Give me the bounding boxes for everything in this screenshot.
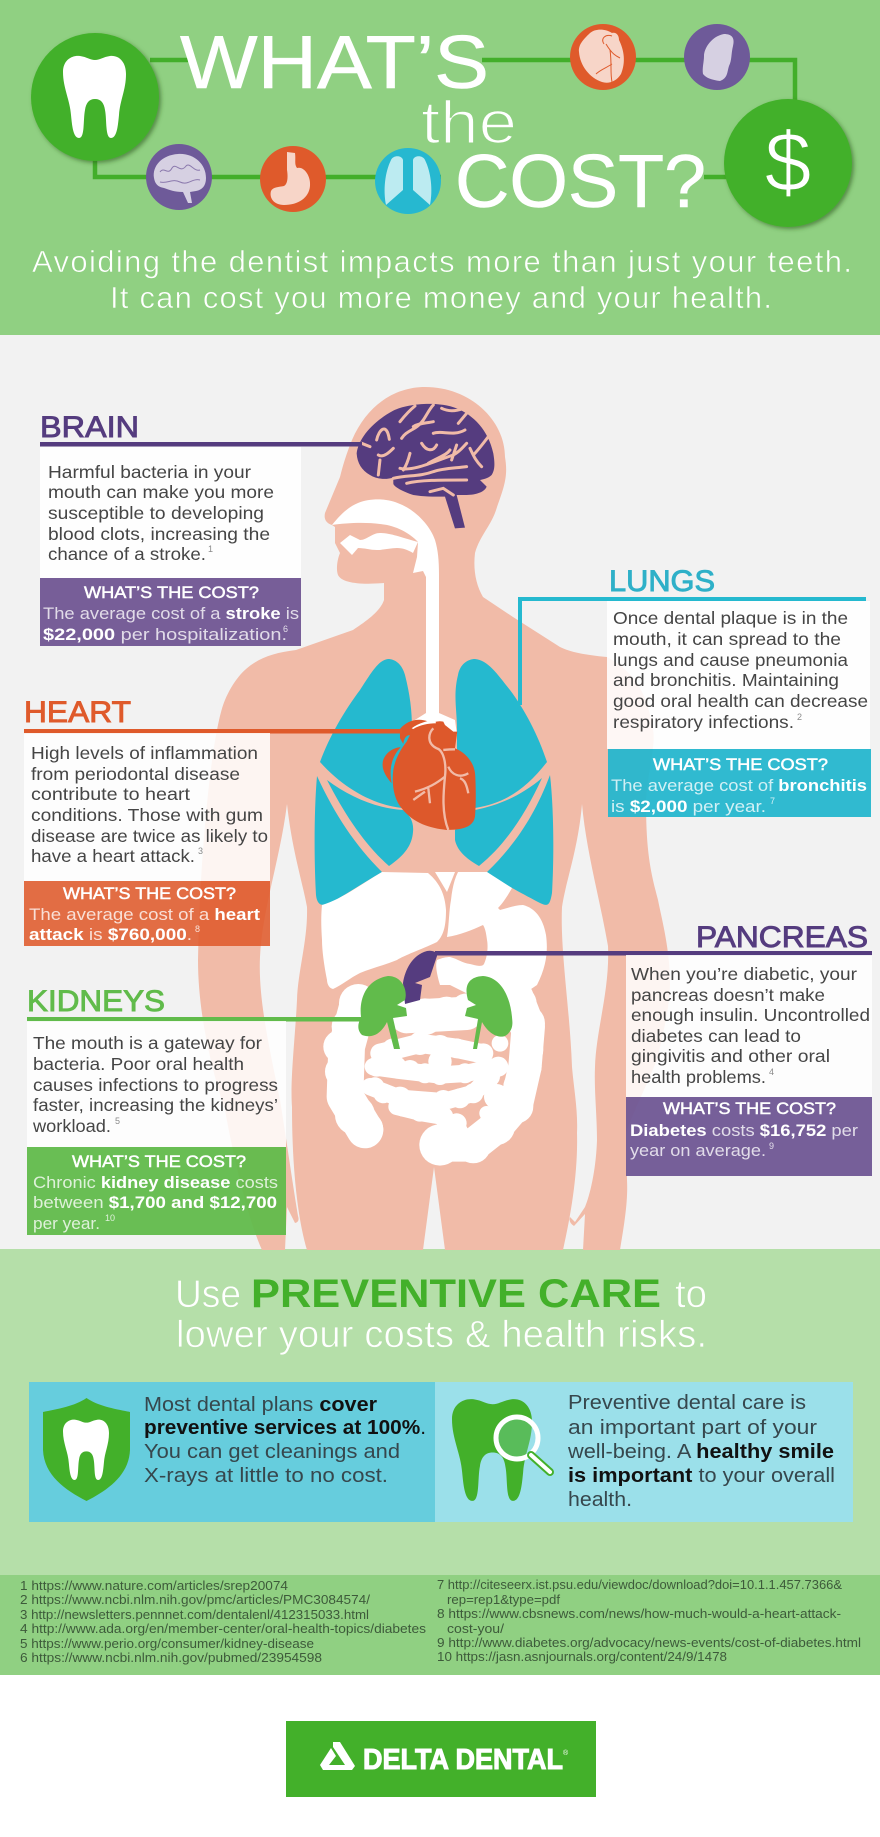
organ: heart [383,719,476,830]
text block: pancreas description: 4 [769,1067,774,1077]
organ: pancreas [403,951,437,1004]
callout: brain cost [40,578,301,646]
icon: heart circle [570,24,636,90]
callout: lungs cost: is $2,000 per year. [611,797,766,816]
text block: well-being: is important to your overall [568,1465,835,1487]
text block: lungs description: lungs and cause pneumonia [613,650,848,670]
panel: pancreas [435,921,872,1176]
text block: lungs description: good oral health can decrease [613,691,868,711]
references: left column: 5 https://www.perio.org/consumer/kidney-disease [20,1636,314,1651]
panel: brain [40,411,362,646]
heading: preventive care: lower your costs & health risks. [176,1314,707,1356]
heading: preventive care: Use [175,1273,241,1316]
heading: brain: BRAIN [40,411,139,444]
connector: lungs line [520,599,866,705]
logo: Delta Dental [286,1721,596,1797]
organ: brain [357,404,494,528]
text block: pancreas description: diabetes can lead to [631,1026,801,1046]
callout: heart cost: WHAT’S THE COST? [63,884,236,903]
organ: intestines [323,977,545,1166]
icon: head circle [684,24,750,90]
logo: Delta Dental: DELTA DENTAL [363,1744,563,1776]
callout: heart cost: 8 [195,924,200,934]
callout: pancreas cost: 9 [769,1141,774,1151]
heading: kidneys: KIDNEYS [27,985,165,1018]
panel: preventive care background [0,1249,880,1575]
callout: lungs cost: WHAT’S THE COST? [653,755,828,774]
text block: lungs description: mouth, it can spread to the [613,629,841,649]
callout: brain cost: WHAT’S THE COST? [84,583,259,602]
organs: airway [332,499,457,735]
text block: well-being: well-being. A healthy smile [567,1441,834,1463]
callout: lungs cost [608,749,871,817]
text block: well-being: health. [568,1489,632,1511]
references: right column: 9 http://www.diabetes.org/advocacy/news-events/cost-of-diabetes.html [437,1635,861,1650]
references: right column: cost-you/ [447,1621,504,1636]
text block: brain description: susceptible to developing [48,503,264,523]
panel: header background [0,0,880,335]
text block: well-being: an important part of your [568,1417,817,1439]
text block: preventive services: You can get cleanings and [144,1441,400,1463]
references: left column: 4 http://www.ada.org/en/member-center/oral-health-topics/diabetes [20,1621,427,1636]
text block: pancreas description [626,955,872,1097]
panel: references background [0,1575,880,1675]
organ: kidneys [358,976,512,1049]
heading: preventive care: to [675,1273,707,1316]
panel: well-being [435,1382,853,1522]
text block: pancreas description: enough insulin. Uncontrolled [631,1005,870,1025]
references: right column: rep=rep1&type=pdf [447,1592,560,1607]
text block: kidneys description: workload. [32,1116,111,1136]
title: COST? [455,139,706,223]
text block: brain description: Harmful bacteria in your [48,462,251,482]
text block: pancreas description: gingivitis and other oral [631,1046,830,1066]
text block: well-being: Preventive dental care is [568,1392,806,1414]
references: right column: 7 http://citeseerx.ist.psu.edu/viewdoc/download?doi=10.1.1.457.7366& [437,1577,842,1592]
body silhouette [198,387,670,1250]
text block: heart description: conditions. Those with gum [31,805,263,825]
text block: well-being [567,1392,835,1511]
callout: lungs cost: The average cost of bronchitis [611,776,867,795]
panel: lungs [520,565,871,817]
callout: heart cost [24,881,270,946]
text block: brain description: blood clots, increasing the [48,524,270,544]
organ: lungs [315,659,553,905]
references: left column: 3 http://newsletters.pennnet.com/dentalenl/412315033.html [20,1607,369,1622]
text block: preventive services: Most dental plans cover [144,1394,377,1416]
heading: lungs: LUNGS [609,565,715,598]
text block: lungs description: 2 [797,712,802,722]
callout: brain cost: $22,000 per hospitalization. [43,625,287,644]
references: left column [20,1578,427,1665]
heading: preventive care: PREVENTIVE CARE [251,1272,661,1316]
references: right column: 10 https://jasn.asnjournals.org/content/24/9/1478 [437,1649,727,1664]
connector: heart line [24,729,402,734]
callout: pancreas cost [626,1097,872,1176]
references: right column [437,1577,861,1664]
panel: body section background [0,335,880,1249]
logo: Delta Dental: ® [563,1749,569,1757]
callout: heart cost: The average cost of a heart [29,905,260,924]
callout: pancreas cost: WHAT’S THE COST? [663,1099,836,1118]
text block: pancreas description: health problems. [631,1067,766,1087]
text block: pancreas description: pancreas doesn’t make [631,985,825,1005]
callout: kidneys cost [27,1147,286,1235]
text block: kidneys description: faster, increasing the kidneys’ [33,1095,278,1115]
text block: brain description: chance of a stroke. [48,544,206,564]
connector: pancreas line [435,951,872,956]
callout: lungs cost: 7 [770,796,775,806]
header graphic: connecting path [95,60,795,177]
text block: kidneys description: bacteria. Poor oral health [33,1054,244,1074]
callout: kidneys cost: WHAT’S THE COST? [72,1152,246,1171]
title: the [421,89,517,156]
icon: dollar circle: $ [765,115,811,209]
organ: liver and stomach [321,872,547,1010]
callout: kidneys cost: Chronic kidney disease costs [33,1173,278,1192]
title [180,20,706,223]
icon: tooth circle [31,33,159,161]
text block: heart description: from periodontal disease [31,764,240,784]
text block: pancreas description: When you’re diabetic, your [631,964,857,984]
text block: preventive services: X-rays at little to no cost. [144,1465,388,1487]
text block: heart description: have a heart attack. [31,846,195,866]
text block: lungs description [607,601,870,749]
icon: lungs circle [375,148,441,214]
callout: brain cost: 6 [283,624,288,634]
icon: tooth with magnifier [452,1399,550,1501]
callout: kidneys cost: 10 [105,1213,115,1223]
text block: lungs description: and bronchitis. Maintaining [613,670,839,690]
panel: preventive services [29,1382,435,1522]
references: left column: 2 https://www.ncbi.nlm.nih.gov/pmc/articles/PMC3084574/ [20,1592,370,1607]
text block: kidneys description [27,1021,286,1147]
text block: brain description [40,447,301,578]
text block: heart description: disease are twice as likely to [31,826,268,846]
callout: heart cost: attack is $760,000 . [29,925,192,944]
references: left column: 1 https://www.nature.com/articles/srep20074 [20,1578,288,1593]
text block: lungs description: Once dental plaque is in the [613,608,848,628]
icon: stomach circle [260,146,326,212]
text block: kidneys description: 5 [115,1116,120,1126]
text block: brain description: 1 [208,544,213,554]
heading: heart: HEART [24,696,131,729]
subtitle [32,244,852,315]
text block: kidneys description: causes infections to progress [33,1075,278,1095]
text block: preventive services [144,1394,426,1487]
references: left column: 6 https://www.ncbi.nlm.nih.gov/pubmed/23954598 [20,1650,322,1665]
text block: heart description: contribute to heart [31,784,190,804]
icon: shield with tooth [43,1398,130,1501]
subtitle: It can cost you more money and your health. [110,280,772,315]
callout: kidneys cost: per year. [33,1214,100,1233]
references: right column: 8 https://www.cbsnews.com/news/how-much-would-a-heart-attack- [437,1606,841,1621]
text block: brain description: mouth can make you more [48,482,274,502]
callout: brain cost: The average cost of a stroke is [43,604,299,623]
connector: kidneys line [27,1017,362,1022]
text block: lungs description: respiratory infections. [613,712,794,732]
text block: preventive services: preventive services at 100% . [144,1417,426,1439]
title: WHAT’S [180,20,489,104]
icon: dollar circle [724,99,852,227]
callout: kidneys cost: between $1,700 and $12,700 [33,1193,277,1212]
text block: heart description: High levels of inflammation [31,743,258,763]
text block: kidneys description: The mouth is a gateway for [33,1033,262,1053]
panel: footer background [0,1675,880,1837]
text block: heart description [24,733,270,881]
heading: preventive care [175,1272,707,1356]
callout: pancreas cost: Diabetes costs $16,752 per [630,1121,858,1140]
heading: pancreas: PANCREAS [696,921,868,954]
connector: brain line [40,442,362,446]
panel: heart [24,696,402,946]
icon: brain circle [146,144,212,210]
text block: heart description: 3 [198,846,203,856]
subtitle: Avoiding the dentist impacts more than just your teeth. [32,244,852,279]
callout: pancreas cost: year on average. [630,1141,766,1160]
panel: kidneys [27,985,362,1235]
